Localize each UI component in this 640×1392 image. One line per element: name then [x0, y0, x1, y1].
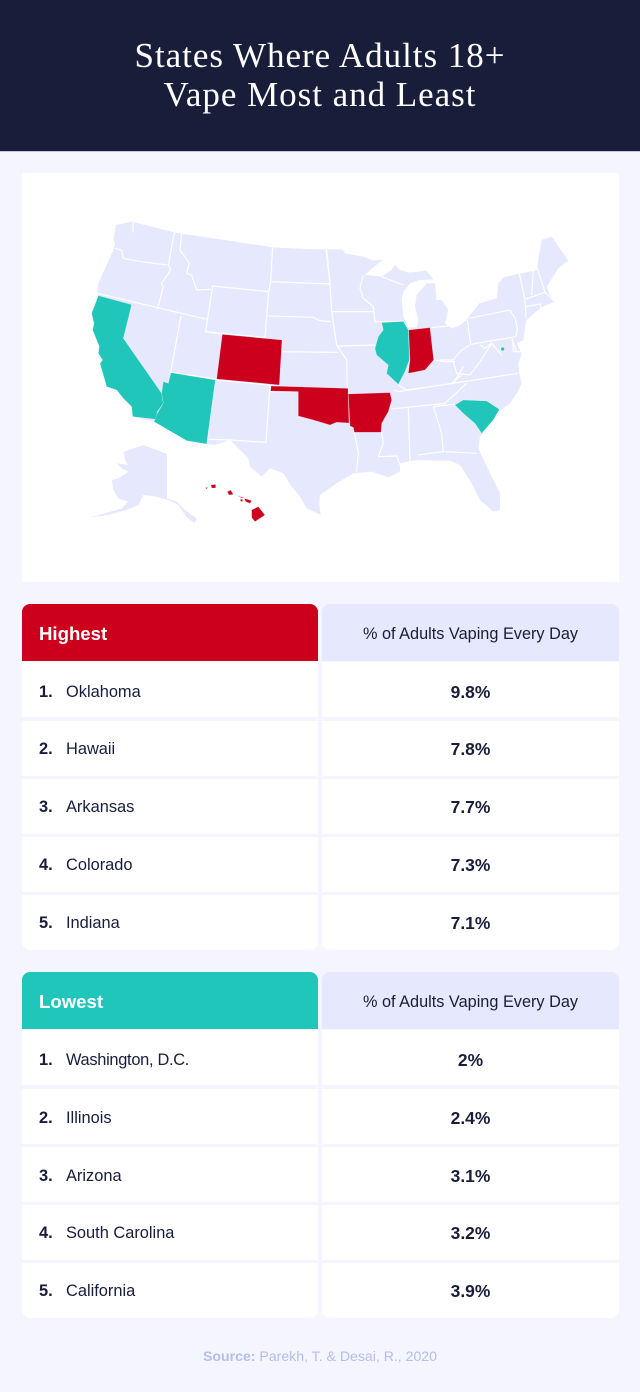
state: Washington, D.C.	[501, 347, 505, 351]
title	[135, 36, 505, 114]
header: percent column: % of Adults Vaping Every Day	[363, 625, 578, 643]
state borders west	[97, 233, 330, 443]
row 2 name	[22, 1089, 318, 1144]
title: Vape Most and Least	[164, 75, 476, 114]
state: Indiana	[408, 328, 434, 373]
row 2 value: 2.4%	[451, 1108, 490, 1128]
header: Lowest	[22, 972, 318, 1029]
row 1 value	[322, 1030, 619, 1085]
row 5 value	[322, 1263, 619, 1318]
table: lowest	[22, 972, 619, 1318]
state: Hawaii	[205, 484, 265, 522]
state: Arizona	[154, 373, 215, 444]
row 4 value: 3.2%	[451, 1223, 490, 1243]
row 2 value	[322, 1089, 619, 1144]
state: South Carolina	[455, 400, 499, 433]
state borders east	[320, 250, 518, 472]
state borders northeast	[440, 267, 555, 383]
row 3 name	[22, 779, 318, 834]
state: California	[92, 296, 163, 419]
row 1 name: 1.	[39, 1051, 53, 1069]
row 5 name: 5.	[39, 1282, 53, 1300]
row 2 value: 7.8%	[451, 739, 490, 759]
row 3 name: Arizona	[66, 1167, 122, 1185]
row 1 name: Washington, D.C.	[66, 1051, 189, 1069]
highlighted states: lowest (teal)	[92, 296, 505, 444]
choropleth map of US states	[91, 222, 568, 524]
row 5 name: Indiana	[66, 914, 120, 932]
row 1 value: 9.8%	[451, 682, 490, 702]
source note: Source: Parekh, T. & Desai, R., 2020	[203, 1348, 437, 1364]
row 3 value	[322, 1147, 619, 1202]
row 2 name: Hawaii	[66, 740, 115, 758]
row 4 name	[22, 837, 318, 892]
row 1 name	[22, 662, 318, 717]
table: highest	[22, 604, 619, 950]
row 4 name: 4.	[39, 856, 53, 874]
row 4 name: 4.	[39, 1224, 53, 1242]
row 4 name: Colorado	[66, 856, 133, 874]
row 2 name: 2.	[39, 740, 53, 758]
row 5 value: 3.9%	[451, 1281, 490, 1301]
row 5 name: 5.	[39, 914, 53, 932]
header: Highest	[22, 604, 318, 661]
row 5 name	[22, 1263, 318, 1318]
panel: US map	[22, 173, 619, 582]
row 1 name: Oklahoma	[66, 683, 141, 701]
row 4 value	[322, 1205, 619, 1260]
header: percent column: % of Adults Vaping Every Day	[363, 993, 578, 1011]
row 4 value	[322, 837, 619, 892]
row 3 name	[22, 1147, 318, 1202]
row 3 name: 3.	[39, 1167, 53, 1185]
row 3 name: Arkansas	[66, 798, 134, 816]
row 2 name	[22, 721, 318, 776]
row 5 value	[322, 895, 619, 950]
row 5 name: California	[66, 1282, 135, 1300]
row 4 name	[22, 1205, 318, 1260]
header: Lowest: Lowest	[39, 991, 103, 1012]
highlighted states: highest (red)	[205, 328, 434, 522]
state: Colorado	[217, 334, 282, 385]
row 5 name	[22, 895, 318, 950]
map base: contiguous states and Alaska	[90, 222, 568, 523]
row 3 value	[322, 779, 619, 834]
row 2 name: 2.	[39, 1109, 53, 1127]
row 4 name: South Carolina	[66, 1224, 174, 1242]
row 3 name: 3.	[39, 798, 53, 816]
state: Oklahoma	[271, 386, 349, 425]
row 1 value: 2%	[458, 1050, 483, 1070]
title: States Where Adults 18+	[135, 36, 505, 75]
row 2 value	[322, 721, 619, 776]
header: Highest: Highest	[39, 623, 107, 644]
row 3 value: 7.7%	[451, 797, 490, 817]
header: percent column	[322, 604, 619, 661]
row 3 value: 3.1%	[451, 1166, 490, 1186]
row 4 value: 7.3%	[451, 855, 490, 875]
row 5 value: 7.1%	[451, 913, 490, 933]
row 1 value	[322, 662, 619, 717]
state: Arkansas	[348, 393, 392, 432]
row 2 name: Illinois	[66, 1109, 112, 1127]
row 1 name	[22, 1030, 318, 1085]
state: Illinois	[375, 321, 409, 384]
header: percent column	[322, 972, 619, 1029]
row 1 name: 1.	[39, 683, 53, 701]
header band	[0, 0, 640, 152]
